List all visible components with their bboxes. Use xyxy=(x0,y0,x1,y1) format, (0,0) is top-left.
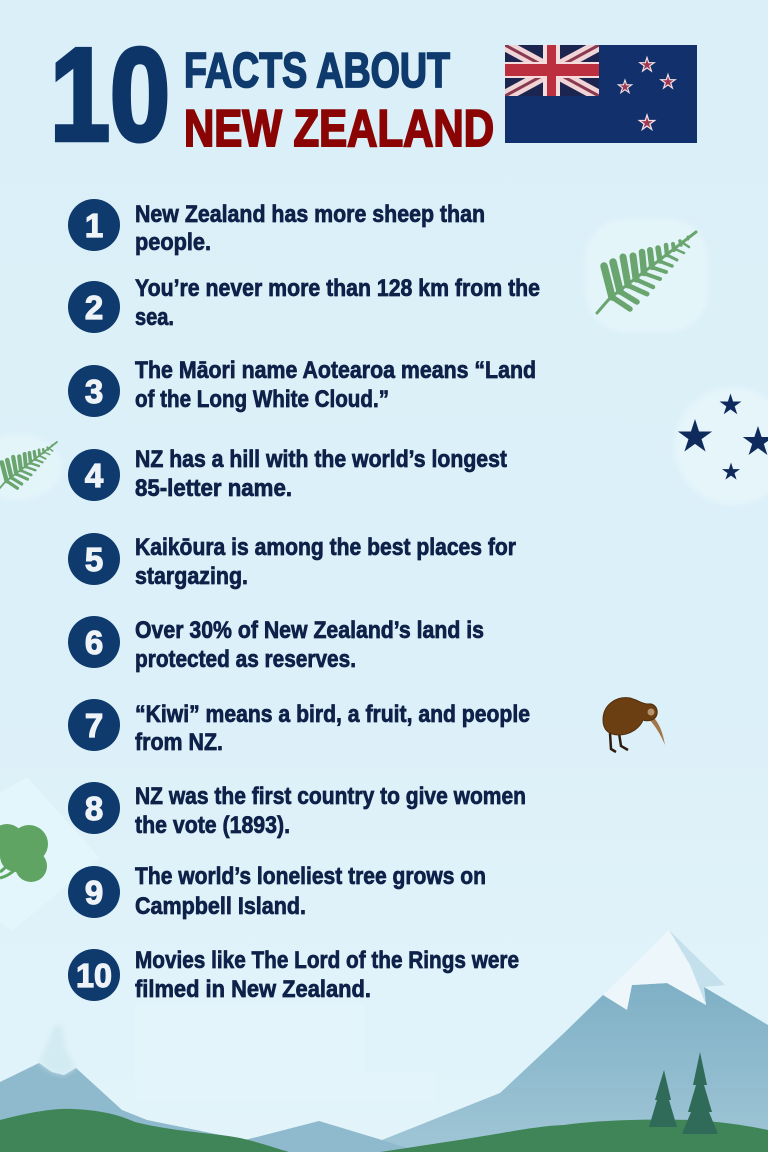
fact 2: 2 xyxy=(85,289,103,326)
fact 5: Kaikōura is among the best places for xyxy=(135,534,516,561)
stars panel right xyxy=(674,387,768,505)
fact 2: You’re never more than 128 km from the xyxy=(135,275,540,302)
title number 10: 10 xyxy=(50,21,170,168)
fern icon top right xyxy=(585,219,708,332)
fact 8 xyxy=(68,782,526,839)
right mountain xyxy=(382,983,768,1152)
fact 9: Campbell Island. xyxy=(135,893,306,920)
fact 2: sea. xyxy=(135,304,174,331)
fact 2 xyxy=(68,275,540,333)
union jack canton xyxy=(505,45,599,96)
fact 10: 10 xyxy=(76,957,112,994)
fact 10: Movies like The Lord of the Rings were xyxy=(135,947,519,974)
fact 9 xyxy=(68,863,486,920)
fact 7: 7 xyxy=(85,707,103,744)
fact list xyxy=(68,199,540,1003)
fact 10: filmed in New Zealand. xyxy=(135,976,371,1003)
fact 8: 8 xyxy=(85,790,103,827)
title: new zealand: NEW ZEALAND xyxy=(184,100,494,158)
fact 4: NZ has a hill with the world’s longest xyxy=(135,446,507,473)
fact 4 xyxy=(68,446,507,502)
fact 6: Over 30% of New Zealand’s land is xyxy=(135,617,484,644)
fact 5 xyxy=(68,533,516,590)
background light patches xyxy=(135,1005,435,1102)
fact 9: 9 xyxy=(85,874,103,911)
fact 3: 3 xyxy=(85,373,103,410)
fact 4: 85-letter name. xyxy=(135,475,292,502)
fact 1: 1 xyxy=(85,207,103,244)
mountains scenery xyxy=(0,930,768,1152)
fact 8: NZ was the first country to give women xyxy=(135,783,526,810)
southern cross stars xyxy=(618,58,675,129)
fact 5: 5 xyxy=(85,541,103,578)
fact 7 xyxy=(68,699,530,756)
fact 1 xyxy=(68,199,485,256)
tree icon left xyxy=(0,777,100,931)
fact 3: of the Long White Cloud.” xyxy=(135,386,389,413)
fact 7: from NZ. xyxy=(135,729,223,756)
fact 6 xyxy=(68,616,484,673)
flag of New Zealand xyxy=(505,45,697,143)
fact 4: 4 xyxy=(85,457,104,494)
fact 5: stargazing. xyxy=(135,563,248,590)
fact 6: protected as reserves. xyxy=(135,646,356,673)
pine tree large xyxy=(682,1052,718,1134)
title: facts about: FACTS ABOUT xyxy=(184,44,450,98)
right hill xyxy=(380,1120,768,1152)
fact 8: the vote (1893). xyxy=(135,812,290,839)
left mountain xyxy=(0,1025,245,1152)
pine tree small xyxy=(649,1070,677,1127)
fact 1: New Zealand has more sheep than xyxy=(135,201,485,228)
middle mountain xyxy=(245,1121,420,1152)
fact 6: 6 xyxy=(85,624,103,661)
fact 1: people. xyxy=(135,229,211,256)
fact 3 xyxy=(68,357,536,417)
left hill xyxy=(0,1109,289,1152)
fact 10 xyxy=(68,947,519,1003)
fact 3: The Māori name Aotearoa means “Land xyxy=(135,357,536,384)
fact 9: The world’s loneliest tree grows on xyxy=(135,863,486,890)
snow cap xyxy=(603,930,725,1010)
fern icon left xyxy=(0,434,62,500)
fact 7: “Kiwi” means a bird, a fruit, and people xyxy=(135,701,530,728)
kiwi bird icon xyxy=(603,698,665,752)
